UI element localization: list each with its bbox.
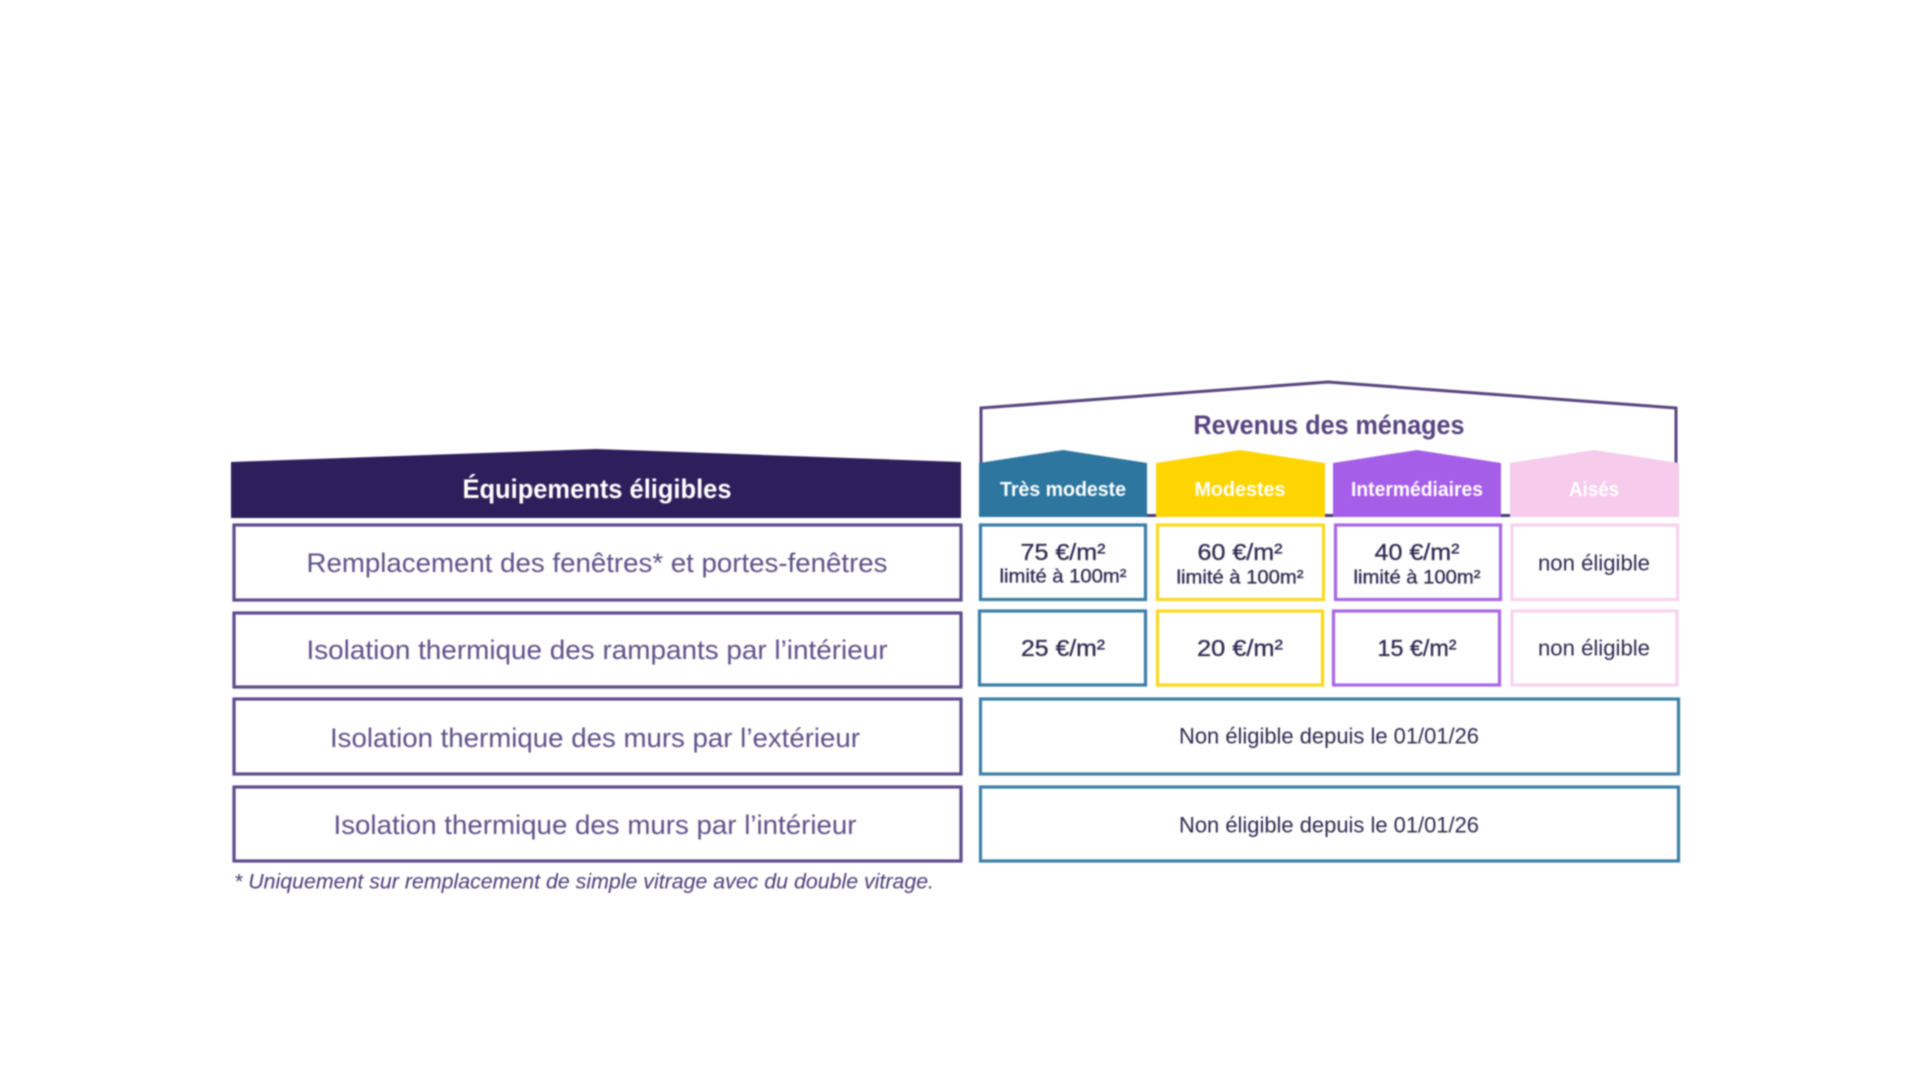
row: murs intérieur: Isolation thermique des murs par l’intérieur (334, 810, 857, 840)
footnote: * Uniquement sur remplacement de simple vitrage avec du double vitrage. (234, 870, 934, 894)
row: murs intérieur (234, 787, 961, 861)
tab: très modeste: Très modeste (1000, 479, 1126, 501)
cell: modestes fenêtres: 60 €/m² (1198, 539, 1283, 565)
cell: non éligible murs extérieur (980, 699, 1678, 774)
cell: modestes fenêtres: limité à 100m² (1176, 568, 1304, 588)
cell: modestes rampants: 20 €/m² (1197, 635, 1283, 661)
cell: intermédiaires fenêtres: limité à 100m² (1354, 568, 1480, 588)
cell: très modeste rampants: 25 €/m² (1021, 635, 1105, 661)
cell: intermédiaires fenêtres (1336, 525, 1500, 600)
row: rampants (234, 613, 961, 687)
cell: aisés rampants: non éligible (1538, 636, 1650, 660)
cell: aisés fenêtres (1512, 525, 1678, 600)
cell: non éligible murs intérieur: Non éligible depuis le 01/01/26 (1179, 812, 1479, 838)
cell: très modeste fenêtres: 75 €/m² (1020, 539, 1106, 565)
cell: intermédiaires fenêtres: 40 €/m² (1374, 539, 1460, 565)
heading: revenus des ménages: Revenus des ménages (1194, 410, 1464, 440)
cell: aisés rampants (1512, 611, 1677, 685)
tab: très modeste (979, 450, 1147, 517)
heading: équipements éligibles (231, 449, 961, 518)
tab: modestes: Modestes (1194, 479, 1286, 501)
tab: intermédiaires: Intermédiaires (1351, 479, 1483, 501)
row: murs extérieur (234, 699, 961, 774)
tab: intermédiaires (1333, 450, 1501, 517)
panel: équipements column (231, 449, 961, 894)
cell: modestes rampants (1158, 611, 1322, 685)
roof outline (981, 382, 1676, 464)
row: rampants: Isolation thermique des rampants par l’intérieur (306, 635, 888, 665)
row: murs extérieur: Isolation thermique des murs par l’extérieur (330, 723, 860, 753)
cell: intermédiaires rampants (1334, 611, 1500, 685)
cell: aisés fenêtres: non éligible (1538, 550, 1650, 576)
heading: équipements éligibles: Équipements éligibles (462, 473, 732, 504)
cell: intermédiaires rampants: 15 €/m² (1378, 635, 1457, 661)
cell: non éligible murs extérieur: Non éligible depuis le 01/01/26 (1179, 724, 1479, 748)
cell: très modeste fenêtres (980, 525, 1146, 600)
tab: aisés (1510, 450, 1679, 517)
baseline connecting tabs (979, 514, 1679, 517)
cell: modestes fenêtres (1158, 525, 1324, 600)
row: fenêtres: Remplacement des fenêtres* et portes-fenêtres (306, 548, 888, 578)
row: fenêtres (234, 525, 961, 600)
tab: aisés: Aisés (1569, 479, 1619, 501)
cell: très modeste fenêtres: limité à 100m² (1000, 566, 1126, 588)
cell: très modeste rampants (980, 611, 1146, 685)
tab: modestes (1156, 450, 1325, 517)
panel: revenus des ménages (979, 382, 1679, 861)
cell: non éligible murs intérieur (980, 787, 1678, 861)
